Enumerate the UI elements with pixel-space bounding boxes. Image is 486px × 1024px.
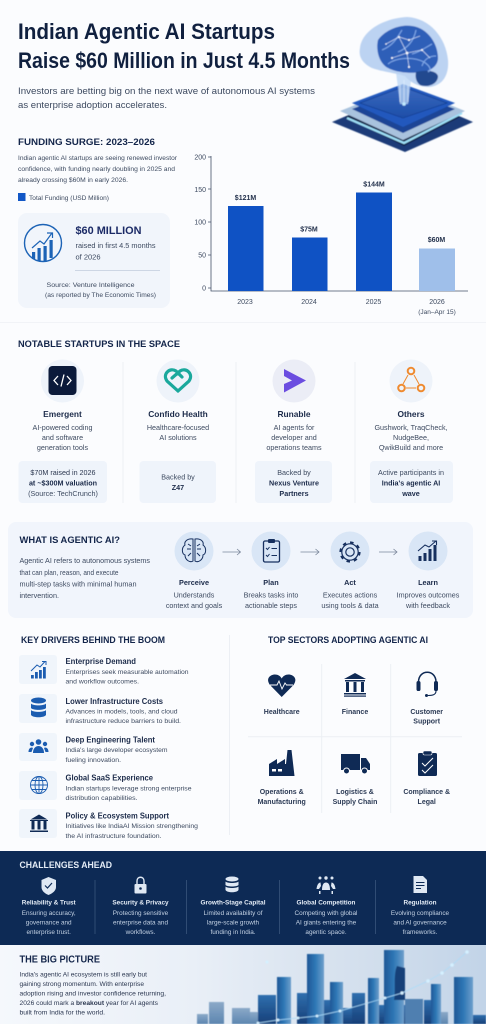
conclusion text: built from India for the world. xyxy=(20,1009,105,1016)
callout: $60 million: of 2026 xyxy=(76,252,100,262)
icon: institution xyxy=(30,814,48,832)
challenge: capital xyxy=(201,876,266,936)
sector: customer support xyxy=(410,672,443,726)
driver: lower infrastructure costs: infrastructure reduce barriers to build. xyxy=(66,718,181,725)
startup: Runable: developer and xyxy=(271,433,317,442)
startup: Emergent: AI-powered coding xyxy=(33,423,92,432)
bar chart: total funding: 200 xyxy=(194,154,206,162)
sector: operations and manufacturing xyxy=(258,750,306,806)
heading: notable startups: NOTABLE STARTUPS IN THE SPACE xyxy=(18,339,180,350)
step: act: using tools & data xyxy=(321,601,379,610)
driver: policy and ecosystem support: Initiatives like IndiaAI Mission strengthening xyxy=(66,823,198,830)
sector: finance: Finance xyxy=(342,709,368,716)
bar: 2025 xyxy=(356,182,392,306)
bar: 2026: $60M xyxy=(428,237,445,244)
conclusion text: India's agentic AI ecosystem is still early but xyxy=(20,972,147,979)
panel: challenges ahead xyxy=(0,851,486,945)
startup: Runable: AI agents for xyxy=(274,423,315,432)
startup: Emergent: generation tools xyxy=(37,443,88,452)
challenge: security: enterprise data and xyxy=(113,920,168,927)
startup: Others: wave xyxy=(401,489,420,498)
startup: Emergent: $70M raised in 2026 xyxy=(30,468,96,477)
panel: big picture xyxy=(0,945,486,1024)
bar chart: total funding: 50 xyxy=(198,252,206,260)
sector: operations and manufacturing: Operations & xyxy=(260,789,304,796)
startup: Emergent: Emergent xyxy=(43,409,82,419)
funding description: already crossing $60M in early 2026. xyxy=(18,177,128,184)
sector: customer support: Customer xyxy=(410,709,443,716)
panel: what is agentic AI: WHAT IS AGENTIC AI? xyxy=(20,535,120,546)
startup: Emergent: (Source: TechCrunch) xyxy=(28,489,98,498)
icon: growth chart in circle xyxy=(24,224,62,262)
startup: Confido Health: AI solutions xyxy=(159,433,197,442)
funding description xyxy=(18,155,178,184)
challenge: capital: Growth-Stage Capital xyxy=(201,899,266,906)
startup: Confido Health xyxy=(140,360,216,503)
funding description: confidence, with funding nearly doubling in 2025 and xyxy=(18,166,175,173)
step: perceive: context and goals xyxy=(166,601,223,610)
bar: 2026: 2026 xyxy=(429,299,445,306)
sector: compliance and legal: Compliance & xyxy=(403,789,450,796)
step: learn: with feedback xyxy=(405,601,450,610)
challenge: capital: funding in India. xyxy=(210,929,256,936)
definition text: Agentic AI refers to autonomous systems xyxy=(20,556,150,565)
title xyxy=(18,19,350,73)
step: plan: actionable steps xyxy=(245,601,297,610)
startup: Runable: operations teams xyxy=(266,443,322,452)
driver: enterprise demand: Enterprise Demand xyxy=(66,657,136,666)
challenge: security: Protecting sensitive xyxy=(113,910,169,917)
panel: challenges ahead: CHALLENGES AHEAD xyxy=(20,860,112,871)
startup: Runable: Backed by xyxy=(277,468,311,477)
startup: Others: Active participants in xyxy=(378,468,444,477)
title: Raise $60 Million in Just 4.5 Months xyxy=(18,48,350,73)
subtitle: Investors are betting big on the next wave of autonomous AI systems xyxy=(18,86,315,97)
icon: code tag xyxy=(48,366,76,395)
definition text: intervention. xyxy=(20,591,59,600)
funding description: Indian agentic AI startups are seeing renewed investor xyxy=(18,155,178,162)
startup: Others: NudgeBee, xyxy=(393,433,429,442)
sector: logistics and supply chain: Logistics & xyxy=(336,789,374,796)
driver: enterprise demand xyxy=(19,655,189,686)
icon: teal heart xyxy=(165,370,191,391)
startup: Confido Health: Confido Health xyxy=(148,409,208,419)
icon: rising bars xyxy=(31,662,46,678)
startup: Others xyxy=(370,360,453,503)
sector: logistics and supply chain: Supply Chain xyxy=(333,799,377,806)
challenge: regulation xyxy=(391,876,450,936)
sector: compliance and legal xyxy=(403,751,450,806)
illustration: brain over chip xyxy=(332,17,473,152)
callout: $60 million: $60 MILLION xyxy=(76,225,142,237)
definition text: multi-step tasks with minimal human xyxy=(20,580,136,588)
startup: Emergent: at ~$300M valuation xyxy=(29,478,97,488)
challenge: regulation: and AI governance xyxy=(393,920,447,927)
bar: 2026: (Jan–Apr 15) xyxy=(418,309,456,316)
startup: Others: India's agentic AI xyxy=(382,478,440,488)
step: act xyxy=(321,532,379,610)
challenge: reliability: Reliability & Trust xyxy=(22,899,77,906)
step: learn xyxy=(397,532,460,610)
icon: people xyxy=(28,739,48,753)
bar chart: total funding xyxy=(194,154,468,316)
step: perceive xyxy=(166,532,223,610)
panel: what is agentic AI xyxy=(8,522,473,618)
panel: key drivers: KEY DRIVERS BEHIND THE BOOM xyxy=(21,635,165,646)
step: learn: Learn xyxy=(418,578,438,587)
challenge: reliability: governance and xyxy=(26,920,72,927)
challenge: security: workflows. xyxy=(125,929,156,936)
driver: lower infrastructure costs: Lower Infrastructure Costs xyxy=(66,697,164,706)
driver: deep engineering talent: Deep Engineering Talent xyxy=(66,736,155,745)
driver: deep engineering talent: India's large developer ecosystem xyxy=(66,747,168,754)
skyline illustration xyxy=(197,950,486,1024)
driver: global SaaS experience: Global SaaS Experience xyxy=(66,774,154,783)
driver: global SaaS experience: Indian startups leverage strong enterprise xyxy=(66,786,192,792)
driver: deep engineering talent: fueling innovation. xyxy=(66,757,121,764)
bar chart: total funding: 100 xyxy=(194,220,206,226)
challenge: regulation: Regulation xyxy=(403,899,437,906)
bar: 2025: 2025 xyxy=(366,299,381,306)
icon: database xyxy=(31,698,46,717)
challenge: capital: Limited availability of xyxy=(204,910,263,917)
callout: $60 million xyxy=(18,213,170,308)
step: plan: Breaks tasks into xyxy=(244,590,298,600)
conclusion text: gaining strong momentum. With enterprise xyxy=(20,981,144,988)
sector: operations and manufacturing: Manufacturing xyxy=(258,799,306,806)
step: act: Act xyxy=(344,578,356,587)
challenge: competition: Competing with global xyxy=(295,910,357,917)
challenge: competition: agentic space. xyxy=(305,929,347,936)
challenge: competition xyxy=(295,876,357,936)
startup: Runable xyxy=(255,360,332,503)
driver: policy and ecosystem support: the AI infrastructure foundation. xyxy=(66,833,162,840)
startup: Others: Gushwork, TraqCheck, xyxy=(374,423,448,432)
startup: Confido Health: Backed by xyxy=(161,472,195,482)
sector: compliance and legal: Legal xyxy=(418,799,436,806)
step: plan: Plan xyxy=(263,578,279,587)
bar: 2025: $144M xyxy=(363,182,385,188)
driver: policy and ecosystem support xyxy=(19,809,198,840)
challenge: security xyxy=(112,877,169,936)
challenge: competition: Global Competition xyxy=(297,899,356,906)
panel: key drivers xyxy=(19,635,198,840)
bar: 2024: $75M xyxy=(300,226,318,234)
challenge: reliability xyxy=(22,877,77,936)
challenge: regulation: Evolving compliance xyxy=(391,910,450,917)
step: learn: Improves outcomes xyxy=(397,590,460,600)
driver: enterprise demand: Enterprises seek measurable automation xyxy=(66,669,189,676)
definition text xyxy=(20,556,150,600)
startup: Runable: Runable xyxy=(277,409,311,419)
challenge: security: Security & Privacy xyxy=(112,899,169,906)
startup: Runable: Partners xyxy=(279,489,309,498)
sector: finance xyxy=(342,673,368,716)
startup: Emergent xyxy=(18,360,107,503)
startup: Others: Others xyxy=(398,409,425,419)
bar: 2024 xyxy=(292,226,328,306)
step: act: Executes actions xyxy=(323,590,378,600)
callout: $60 million: (as reported by The Economic Times) xyxy=(45,292,156,299)
bar: 2023: $121M xyxy=(235,195,256,202)
startup: Others: QwikBuild and more xyxy=(379,443,443,452)
arrow xyxy=(222,549,240,555)
driver: global SaaS experience: distribution capabilities. xyxy=(66,795,138,802)
conclusion text: 2026 could mark a breakout year for AI agents xyxy=(20,1000,159,1007)
challenge: regulation: frameworks. xyxy=(403,929,438,936)
bar: 2026 xyxy=(418,237,456,316)
step: perceive: Perceive xyxy=(179,578,209,587)
arrow xyxy=(300,549,319,555)
challenge: reliability: Ensuring accuracy, xyxy=(22,910,76,917)
driver: global SaaS experience xyxy=(19,771,192,802)
sector: customer support: Support xyxy=(413,719,441,726)
subtitle xyxy=(18,86,315,111)
sector: logistics and supply chain xyxy=(333,754,377,806)
driver: policy and ecosystem support: Policy & Ecosystem Support xyxy=(66,811,169,820)
panel: big picture: THE BIG PICTURE xyxy=(20,955,100,966)
bar: 2023 xyxy=(228,195,264,306)
driver: deep engineering talent xyxy=(19,733,168,764)
step: plan xyxy=(244,532,298,610)
bar chart: total funding: 0 xyxy=(202,286,206,292)
legend: Total Funding (USD Million) xyxy=(29,195,109,202)
title: Indian Agentic AI Startups xyxy=(18,19,275,44)
callout: $60 million: raised in first 4.5 months xyxy=(76,241,156,250)
startup: Runable: Nexus Venture xyxy=(269,478,319,488)
sector: healthcare: Healthcare xyxy=(264,709,300,716)
icon: globe xyxy=(30,776,48,794)
heading: funding surge: FUNDING SURGE: 2023–2026 xyxy=(18,137,155,148)
bar chart: total funding: 150 xyxy=(194,187,206,194)
conclusion text xyxy=(20,972,166,1016)
subtitle: as enterprise adoption accelerates. xyxy=(18,100,167,111)
legend xyxy=(18,193,109,202)
challenge: reliability: enterprise trust. xyxy=(26,929,71,936)
driver: enterprise demand: and workflow outcomes. xyxy=(66,679,139,686)
callout: $60 million: Source: Venture Intelligence xyxy=(46,282,135,289)
bar: 2024: 2024 xyxy=(301,299,317,306)
startup: Confido Health: Z47 xyxy=(172,483,184,492)
definition text: that can plan, reason, and execute xyxy=(20,568,118,577)
icon: purple play xyxy=(284,369,306,392)
conclusion text: adoption rising and investor confidence returning, xyxy=(20,991,166,998)
startup: Emergent: and software xyxy=(42,433,83,442)
panel: top sectors: TOP SECTORS ADOPTING AGENTIC AI xyxy=(268,635,428,646)
challenge: competition: AI giants entering the xyxy=(296,920,357,927)
sector: healthcare xyxy=(264,674,300,716)
driver: lower infrastructure costs: Advances in models, tools, and cloud xyxy=(66,708,178,716)
driver: lower infrastructure costs xyxy=(19,694,181,725)
step: perceive: Understands xyxy=(174,590,215,600)
arrow xyxy=(379,549,397,555)
bar: 2023: 2023 xyxy=(237,299,253,306)
challenge: capital: large-scale growth xyxy=(207,920,260,927)
panel: top sectors xyxy=(248,635,462,813)
icon: orange network xyxy=(398,368,424,391)
startup: Confido Health: Healthcare-focused xyxy=(147,423,209,432)
